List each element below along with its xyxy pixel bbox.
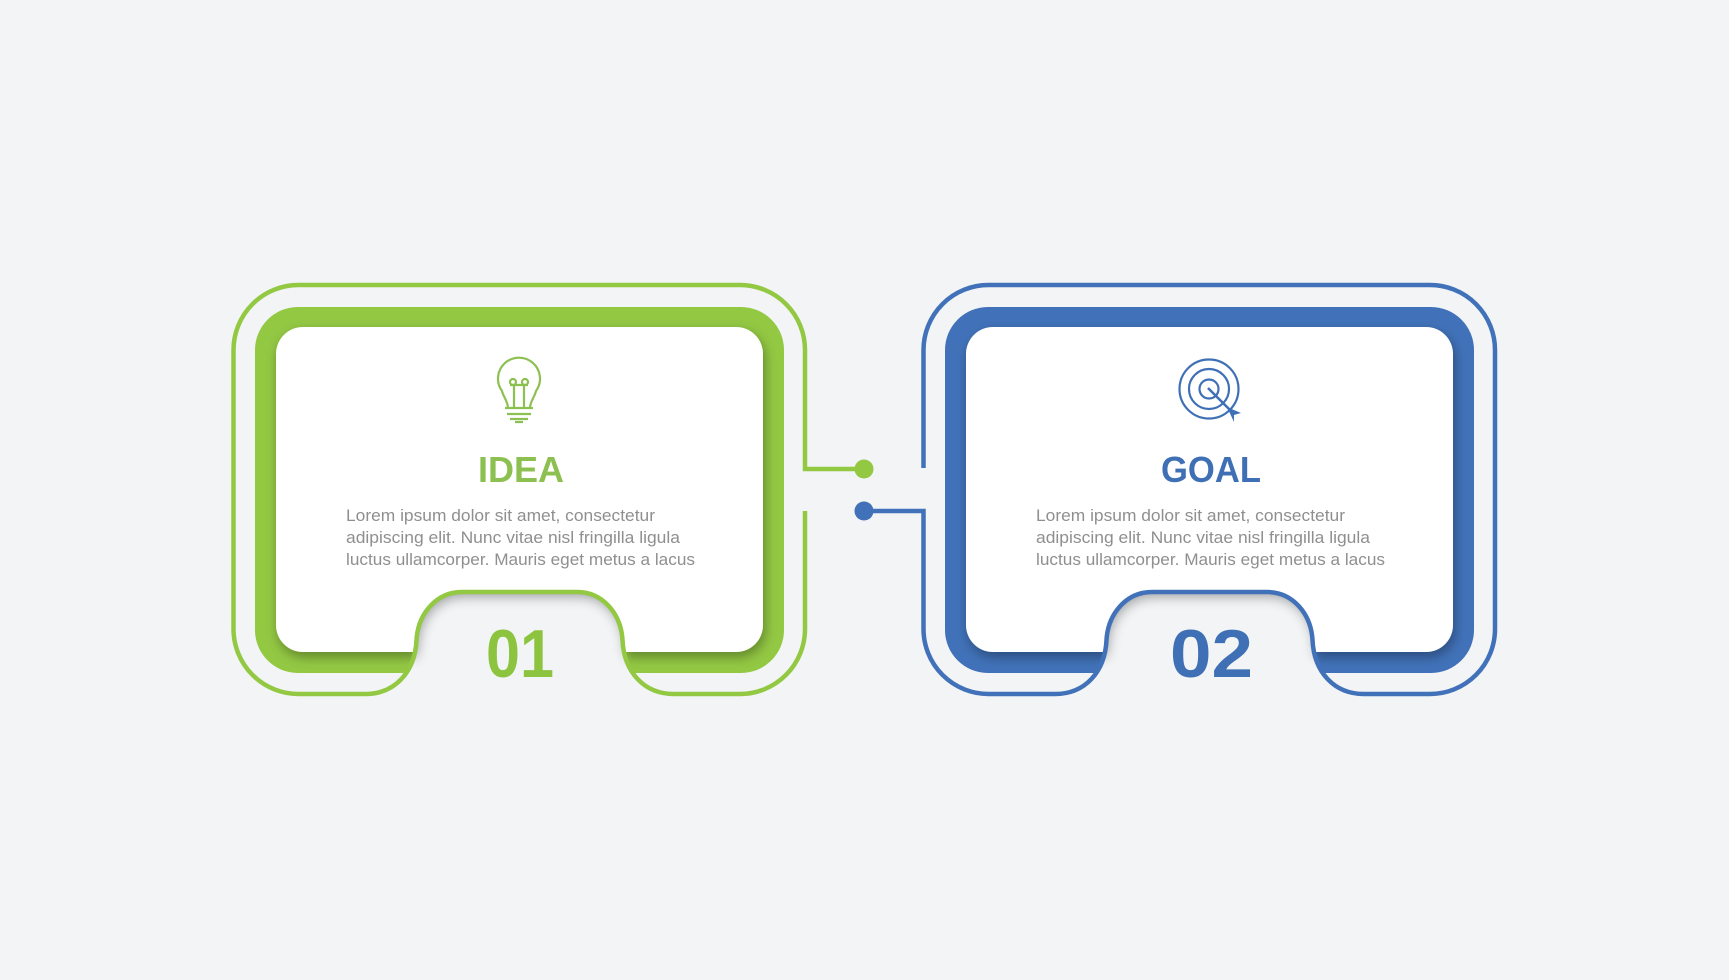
notch cut-out <box>365 592 674 694</box>
notch cut-out <box>1055 592 1364 694</box>
number 01: 01 <box>486 616 554 692</box>
text block: idea description: luctus ullamcorper. Mauris eget metus a lacus <box>346 550 695 569</box>
white card <box>966 327 1453 652</box>
text block: idea description: Lorem ipsum dolor sit amet, consectetur <box>346 506 655 525</box>
text block: goal description: luctus ullamcorper. Mauris eget metus a lacus <box>1036 550 1385 569</box>
white card <box>276 327 763 652</box>
panel: idea <box>234 285 874 694</box>
icon: target with arrow <box>1180 360 1241 422</box>
heading: idea: IDEA <box>478 449 564 490</box>
icon: light bulb <box>498 358 540 422</box>
text block: idea description <box>346 506 695 569</box>
outer green outline with connector and dot <box>234 285 874 694</box>
text block: idea description: adipiscing elit. Nunc vitae nisl fringilla ligula <box>346 528 681 547</box>
text block: goal description: Lorem ipsum dolor sit amet, consectetur <box>1036 506 1345 525</box>
text block: goal description <box>1036 506 1385 569</box>
panel: goal <box>854 285 1495 694</box>
thick green frame <box>255 307 784 673</box>
number 02: 02 <box>1170 616 1253 692</box>
outer blue outline with connector and dot <box>854 285 1495 694</box>
heading: goal: GOAL <box>1161 449 1261 490</box>
text block: goal description: adipiscing elit. Nunc vitae nisl fringilla ligula <box>1036 528 1371 547</box>
thick blue frame <box>945 307 1474 673</box>
